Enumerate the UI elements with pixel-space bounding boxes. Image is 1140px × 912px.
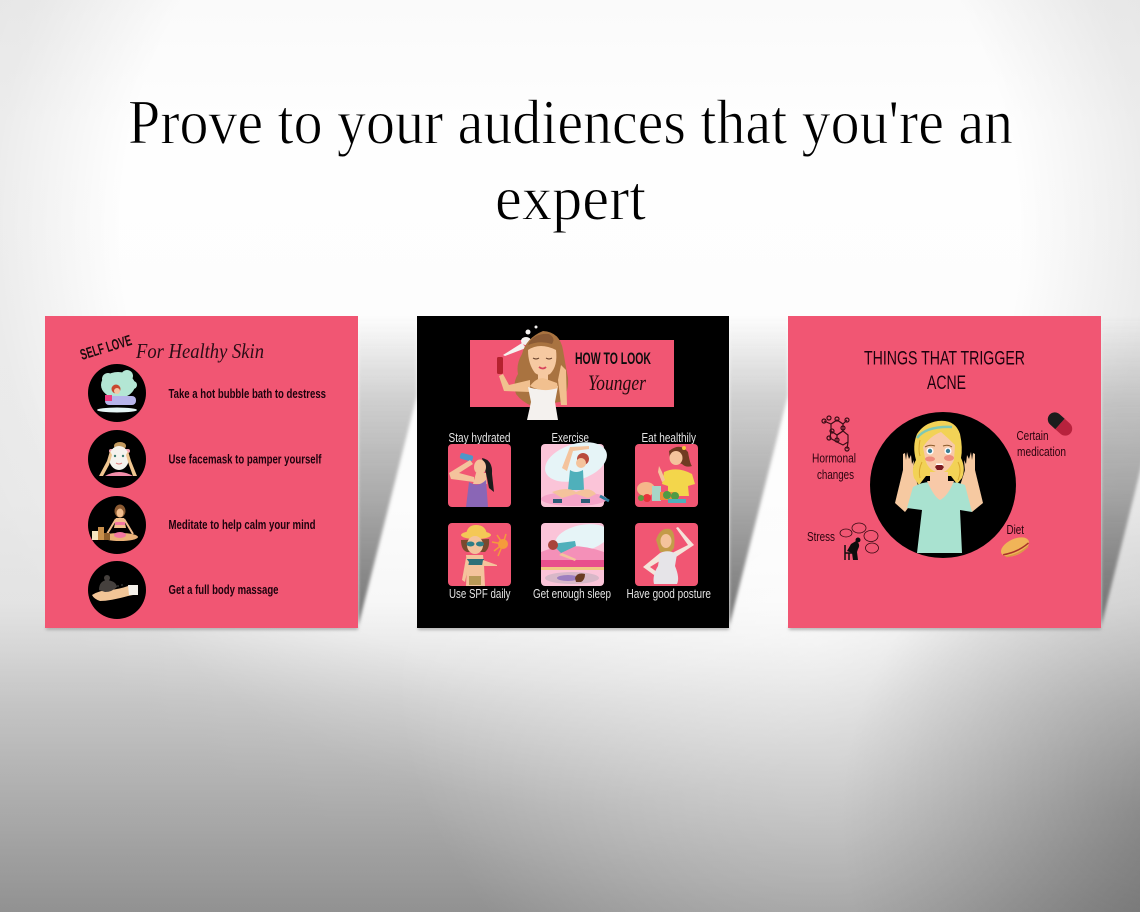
illustration: woman with spray [497,326,568,420]
heading: for healthy skin: For Healthy Skin [135,339,264,363]
label: exercise: Exercise [552,430,589,445]
label: hormonal changes: Hormonal [812,452,856,466]
label: have good posture: Have good posture [626,586,711,601]
cast shadows behind cards [46,318,1140,630]
title: Prove to your audiences that you're an [128,86,1013,158]
panel: how to look younger [417,316,729,628]
label: eat healthily: Eat healthily [642,430,696,445]
text: facemask: Use facemask to pamper yourself [168,452,322,466]
label: stay hydrated: Stay hydrated [448,430,510,445]
illustration: worried woman with acne [870,412,1016,558]
title [128,86,1013,234]
title: expert [495,162,646,234]
heading: THINGS THAT TRIGGER [864,348,1025,370]
heading [864,348,1025,394]
label: certain medication: Certain [1016,429,1049,443]
icon: facemask [88,430,146,488]
heading: how to look: HOW TO LOOK [575,349,651,368]
icon: pill [1045,409,1075,439]
panel: self love for healthy skin [45,316,358,628]
text: meditation: Meditate to help calm your mind [168,518,316,532]
label: diet: Diet [1006,523,1024,537]
icon: molecule [822,416,849,451]
panel: things that trigger acne [788,316,1101,628]
label: get enough sleep: Get enough sleep [533,586,611,601]
heading: self love: SELF LOVE [78,332,134,364]
tile: eat healthily [635,444,698,507]
label: certain medication: medication [1017,445,1066,459]
text: massage: Get a full body massage [168,583,279,597]
text: bubble bath: Take a hot bubble bath to destress [168,387,326,401]
tile: use spf daily [448,523,511,586]
icon: meditation [88,496,146,554]
label: certain medication [1016,429,1066,459]
label: use spf daily: Use SPF daily [449,586,511,601]
tile: have good posture [635,523,698,586]
heading banner [470,340,674,407]
icon: stressed person with thought clouds [840,523,878,560]
icon: bubble bath [88,364,146,422]
label: stress: Stress [807,530,835,544]
icon: massage [88,561,146,619]
label: hormonal changes [812,452,856,482]
tile: exercise [540,435,612,507]
heading: younger: Younger [588,370,646,395]
icon: sandwich [998,533,1032,561]
tile: stay hydrated [448,444,511,507]
heading: ACNE [927,373,966,394]
label: hormonal changes: changes [817,468,854,482]
tile: get enough sleep [541,523,604,586]
